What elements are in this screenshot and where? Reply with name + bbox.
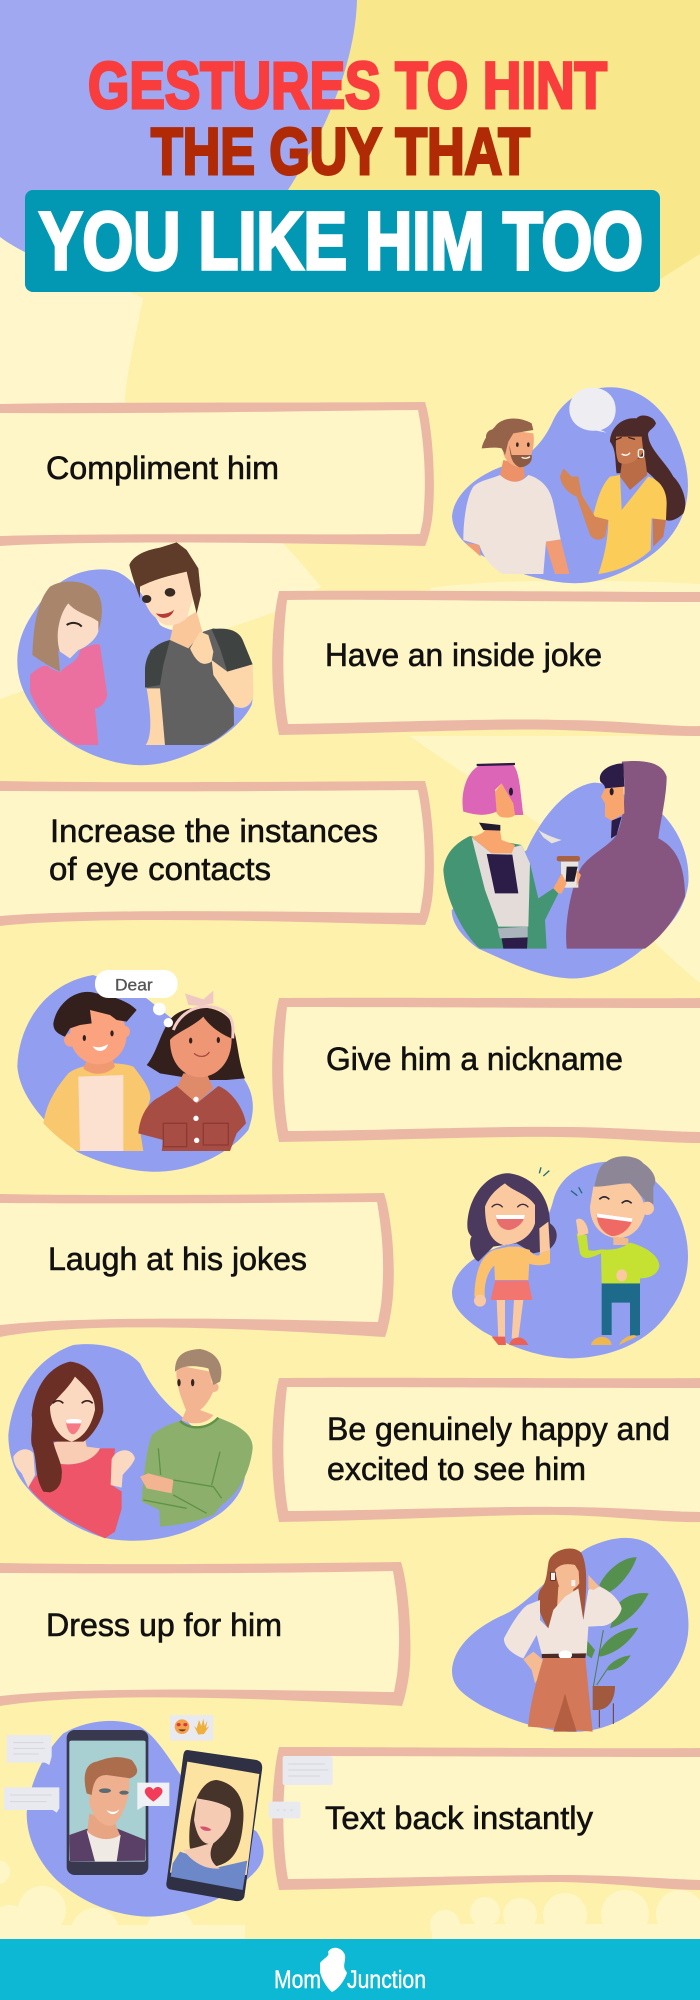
coffee cup xyxy=(538,830,581,893)
speech bubble: Dear xyxy=(95,970,178,1027)
illustration: woman with plant xyxy=(452,1538,688,1732)
background: bottom clouds xyxy=(0,1860,700,1956)
plant xyxy=(587,1557,649,1727)
title xyxy=(25,48,660,292)
illustration: laughing couple xyxy=(452,1156,688,1358)
illustration: woman with pink hair and man in hoodie xyxy=(443,761,689,978)
woman xyxy=(560,416,685,574)
text: Be genuinely happy and xyxy=(327,1411,670,1447)
man xyxy=(463,419,569,574)
background shape: yellow xyxy=(280,0,700,292)
text: Laugh at his jokes xyxy=(48,1241,307,1277)
text: Compliment him xyxy=(46,450,279,486)
title line 2: THE GUY THAT xyxy=(151,114,530,188)
girl xyxy=(467,1173,557,1345)
speech bubble: Dear: Dear xyxy=(115,976,153,995)
illustration: couple with nickname bubble xyxy=(17,970,253,1172)
woman xyxy=(443,763,558,949)
girl xyxy=(138,991,246,1151)
speech bubble xyxy=(569,388,616,433)
illustration: phones texting xyxy=(4,1715,333,1917)
illustration: excited woman and man xyxy=(8,1344,253,1541)
panel: nickname xyxy=(272,998,700,1143)
illustration: girl and boy sharing a joke xyxy=(17,542,253,765)
text xyxy=(49,813,378,887)
blob xyxy=(452,1538,688,1732)
blob xyxy=(27,1721,264,1917)
panel: laugh xyxy=(0,1193,394,1337)
blob xyxy=(17,569,253,765)
panel: text back xyxy=(272,1747,700,1890)
text: Give him a nickname xyxy=(326,1041,623,1077)
logo text: Junction: Junction xyxy=(347,1966,426,1994)
boy xyxy=(576,1156,659,1345)
text: Text back instantly xyxy=(325,1800,593,1836)
panel: eye contacts xyxy=(0,781,434,926)
blob xyxy=(8,1344,245,1541)
text: Increase the instances xyxy=(50,813,378,849)
logo icon xyxy=(320,1948,347,1992)
girl xyxy=(30,581,107,745)
boy xyxy=(129,542,253,745)
text: Dress up for him xyxy=(46,1607,282,1643)
panel: compliment him xyxy=(0,402,434,546)
man in hoodie xyxy=(566,761,685,949)
chat bubbles xyxy=(4,1715,333,1818)
panel: genuinely happy xyxy=(272,1378,700,1522)
blob xyxy=(17,975,253,1172)
blob xyxy=(452,783,689,978)
text: Have an inside joke xyxy=(325,637,602,673)
motion marks xyxy=(539,1167,582,1196)
logo text: Mom: Mom xyxy=(274,1966,321,1994)
footer xyxy=(0,1939,700,2000)
title banner xyxy=(25,190,660,292)
illustration: man and woman talking xyxy=(452,387,688,583)
phone: man xyxy=(67,1730,148,1875)
boy xyxy=(43,992,150,1151)
text: excited to see him xyxy=(327,1451,586,1487)
text xyxy=(327,1411,670,1487)
panel: dress up xyxy=(0,1562,410,1706)
man xyxy=(140,1349,253,1527)
blob xyxy=(452,387,688,583)
panel: inside joke xyxy=(272,591,700,736)
background shape: periwinkle xyxy=(0,0,357,262)
blob xyxy=(452,1162,688,1358)
woman xyxy=(504,1549,622,1732)
woman xyxy=(13,1362,135,1538)
phone: woman xyxy=(166,1750,262,1901)
text: of eye contacts xyxy=(49,851,271,887)
